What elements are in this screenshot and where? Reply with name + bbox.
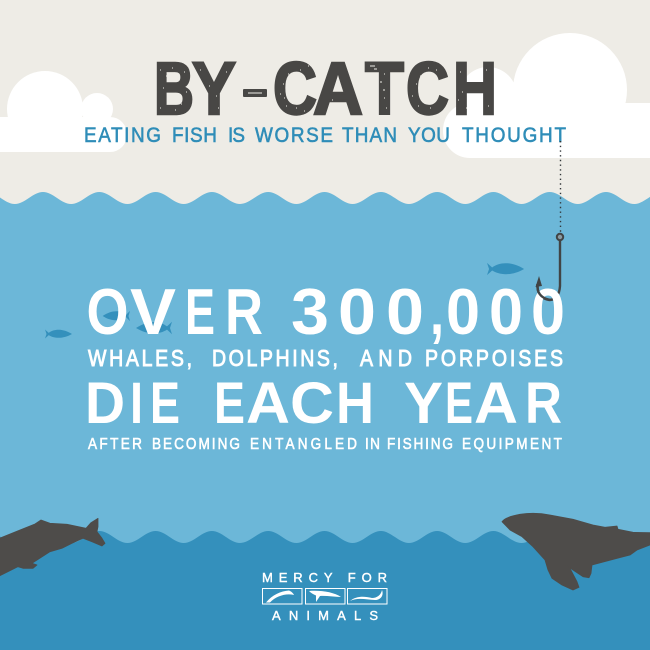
- headline: over 300,000: E: [185, 275, 215, 348]
- subtitle: IS: [228, 124, 245, 147]
- subheading: whales, dolphins, and porpoises: DOLPHINS,: [212, 346, 338, 371]
- headline: die each year: Y: [404, 371, 443, 436]
- headline: over 300,000: ,: [430, 275, 444, 348]
- cloud: left: [0, 71, 127, 152]
- title: T: [365, 47, 404, 130]
- logo text: animals: ANIMALS: [272, 608, 378, 623]
- headline: die each year: H: [336, 371, 374, 436]
- subheading: whales, dolphins, and porpoises: WHALES,: [88, 346, 192, 371]
- deep water: [0, 531, 650, 650]
- headline: over 300,000: 0: [446, 275, 480, 348]
- whale: left: [0, 518, 105, 576]
- cloud: right: [443, 33, 650, 158]
- title: C: [406, 47, 449, 130]
- headline: die each year: E: [445, 371, 473, 436]
- headline: die each year: [85, 371, 562, 436]
- headline: die each year: E: [214, 371, 245, 436]
- title: B: [154, 47, 194, 130]
- fish: under V: [136, 322, 172, 334]
- headline: over 300,000: 0: [489, 275, 523, 348]
- subheading: after becoming entangled: FISHING: [387, 436, 453, 453]
- subheading: after becoming entangled: ENTANGLED: [250, 436, 357, 453]
- subtitle: [84, 124, 566, 147]
- title: H: [453, 47, 497, 130]
- fishing line: [560, 141, 562, 232]
- subheading: after becoming entangled: EQUIPMENT: [462, 436, 562, 453]
- headline: die each year: R: [525, 371, 562, 436]
- subtitle: THOUGHT: [462, 124, 566, 147]
- subtitle: WORSE: [255, 124, 333, 147]
- headline: die each year: D: [85, 371, 125, 436]
- subtitle: YOU: [408, 124, 450, 147]
- headline: die each year: I: [130, 371, 143, 436]
- headline: over 300,000: [86, 275, 565, 348]
- fish: upper right: [487, 263, 524, 275]
- water: [0, 192, 650, 650]
- headline: over 300,000: 0: [338, 275, 376, 348]
- logo icon: dolphin panel: [306, 588, 345, 604]
- logo icon: fish panel: [348, 588, 387, 604]
- title: Y: [192, 47, 236, 130]
- subheading: whales, dolphins, and porpoises: PORPOISES: [425, 346, 563, 371]
- hook point in front of text: [536, 276, 551, 300]
- headline: over 300,000: 3: [291, 275, 329, 348]
- headline: die each year: A: [246, 371, 290, 436]
- subtitle: EATING: [84, 124, 161, 147]
- headline: over 300,000: R: [225, 275, 263, 348]
- headline: over 300,000: O: [86, 275, 128, 348]
- headline: over 300,000: 0: [386, 275, 424, 348]
- whale: right: [502, 513, 650, 590]
- hook: [538, 234, 563, 300]
- subheading: after becoming entangled: [88, 436, 562, 453]
- headline: over 300,000: V: [130, 275, 176, 348]
- subheading: whales, dolphins, and porpoises: [88, 346, 563, 371]
- title: [154, 47, 497, 130]
- headline: die each year: C: [290, 371, 334, 436]
- fish: far left: [45, 330, 72, 338]
- subheading: whales, dolphins, and porpoises: AND: [360, 346, 412, 371]
- subheading: after becoming entangled: AFTER: [88, 436, 142, 453]
- logo: [262, 570, 387, 623]
- subtitle: THAN: [342, 124, 397, 147]
- subheading: after becoming entangled: IN: [365, 436, 380, 453]
- headline: over 300,000: 0: [531, 275, 565, 348]
- headline: die each year: A: [474, 371, 518, 436]
- headline: die each year: E: [150, 371, 180, 436]
- logo text: mercy for: MERCY FOR: [262, 570, 387, 585]
- title: A: [313, 47, 363, 130]
- subtitle: FISH: [172, 124, 217, 147]
- subheading: after becoming entangled: BECOMING: [152, 436, 240, 453]
- logo icon: whale panel: [262, 588, 302, 604]
- fish: inside O: [103, 311, 130, 321]
- title: C: [273, 47, 317, 130]
